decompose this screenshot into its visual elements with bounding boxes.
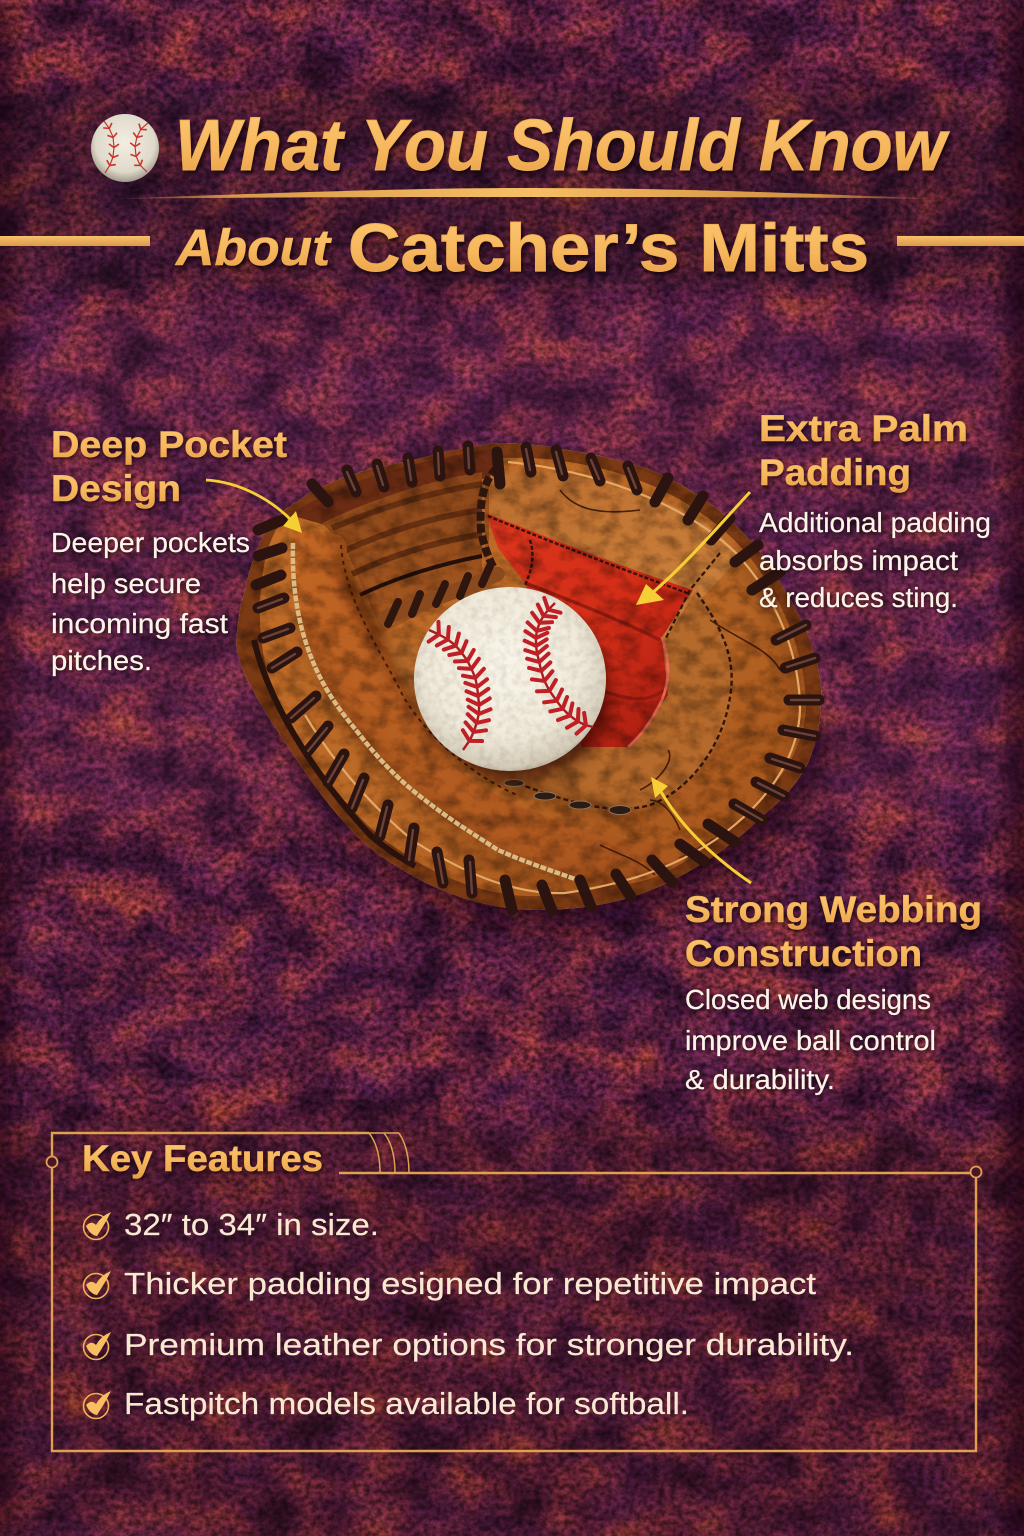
callout body: help secure — [51, 568, 201, 599]
callout heading: Padding — [759, 452, 911, 493]
callout body: Deeper pockets — [51, 527, 250, 558]
left roll pad — [291, 530, 690, 885]
right title bar — [897, 236, 1024, 246]
palm pocket — [383, 590, 732, 812]
callout body: incoming fast — [51, 608, 228, 639]
callout heading: Strong Webbing — [685, 889, 982, 930]
callout: deep pocket design — [51, 424, 287, 676]
beige seam welt on left roll — [293, 543, 578, 880]
callout body: Additional padding — [759, 507, 991, 538]
mitt lacing — [256, 446, 819, 911]
feature item 3: Premium leather options for stronger durability. — [124, 1327, 854, 1362]
stitched pocket arc — [517, 593, 732, 809]
mitt cast shadow — [262, 660, 830, 930]
palm heel upper — [490, 470, 738, 650]
callout body: & reduces sting. — [759, 582, 958, 613]
callout body — [685, 984, 936, 1095]
feature item 4: Fastpitch models available for softball. — [124, 1386, 689, 1421]
web edge lacing — [481, 468, 497, 574]
callout body: pitches. — [51, 645, 152, 676]
title block — [0, 106, 1024, 286]
arrow: extra palm padding — [636, 492, 750, 605]
callout heading: Construction — [685, 933, 922, 974]
callout body: improve ball control — [685, 1025, 936, 1056]
callout body: Closed web designs — [685, 984, 931, 1015]
callout heading — [685, 889, 982, 974]
panel frame — [46, 1133, 982, 1451]
mitt leather body — [236, 443, 821, 910]
catcher's mitt illustration — [236, 443, 830, 930]
pocket shading — [300, 480, 795, 880]
callout heading: Design — [51, 468, 181, 509]
red palm padding — [486, 513, 693, 747]
baseball — [414, 587, 610, 779]
title divider swoosh — [108, 188, 945, 199]
arrow: deep pocket — [206, 480, 302, 533]
callout body — [51, 527, 250, 676]
palm eyelets — [504, 780, 631, 814]
callout: strong webbing construction — [685, 889, 982, 1095]
callout heading — [759, 408, 968, 493]
callout heading: Deep Pocket — [51, 424, 287, 465]
top-left rolled rim — [290, 448, 498, 525]
feature item 2: Thicker padding esigned for repetitive impact — [124, 1266, 816, 1301]
callout heading — [51, 424, 287, 509]
callout body: & durability. — [685, 1064, 835, 1095]
web back pad — [322, 472, 498, 633]
feature item 1: 32″ to 34″ in size. — [124, 1207, 379, 1242]
callout body — [759, 507, 991, 613]
left title bar — [0, 236, 150, 246]
panel: key features — [46, 1133, 982, 1451]
callout heading: Extra Palm — [759, 408, 968, 449]
callout body: absorbs impact — [759, 545, 958, 576]
arrow: strong webbing — [651, 777, 751, 883]
inner rim welt line — [305, 462, 800, 893]
title line 2: About: About — [174, 219, 332, 276]
icon: small baseball — [91, 114, 159, 182]
callout: extra palm padding — [759, 408, 991, 613]
title line 2: Catcher's Mitts: Catcher’s Mitts — [348, 210, 869, 286]
panel heading: Key Features — [82, 1138, 323, 1179]
title line 1: What You Should Know — [175, 106, 950, 186]
